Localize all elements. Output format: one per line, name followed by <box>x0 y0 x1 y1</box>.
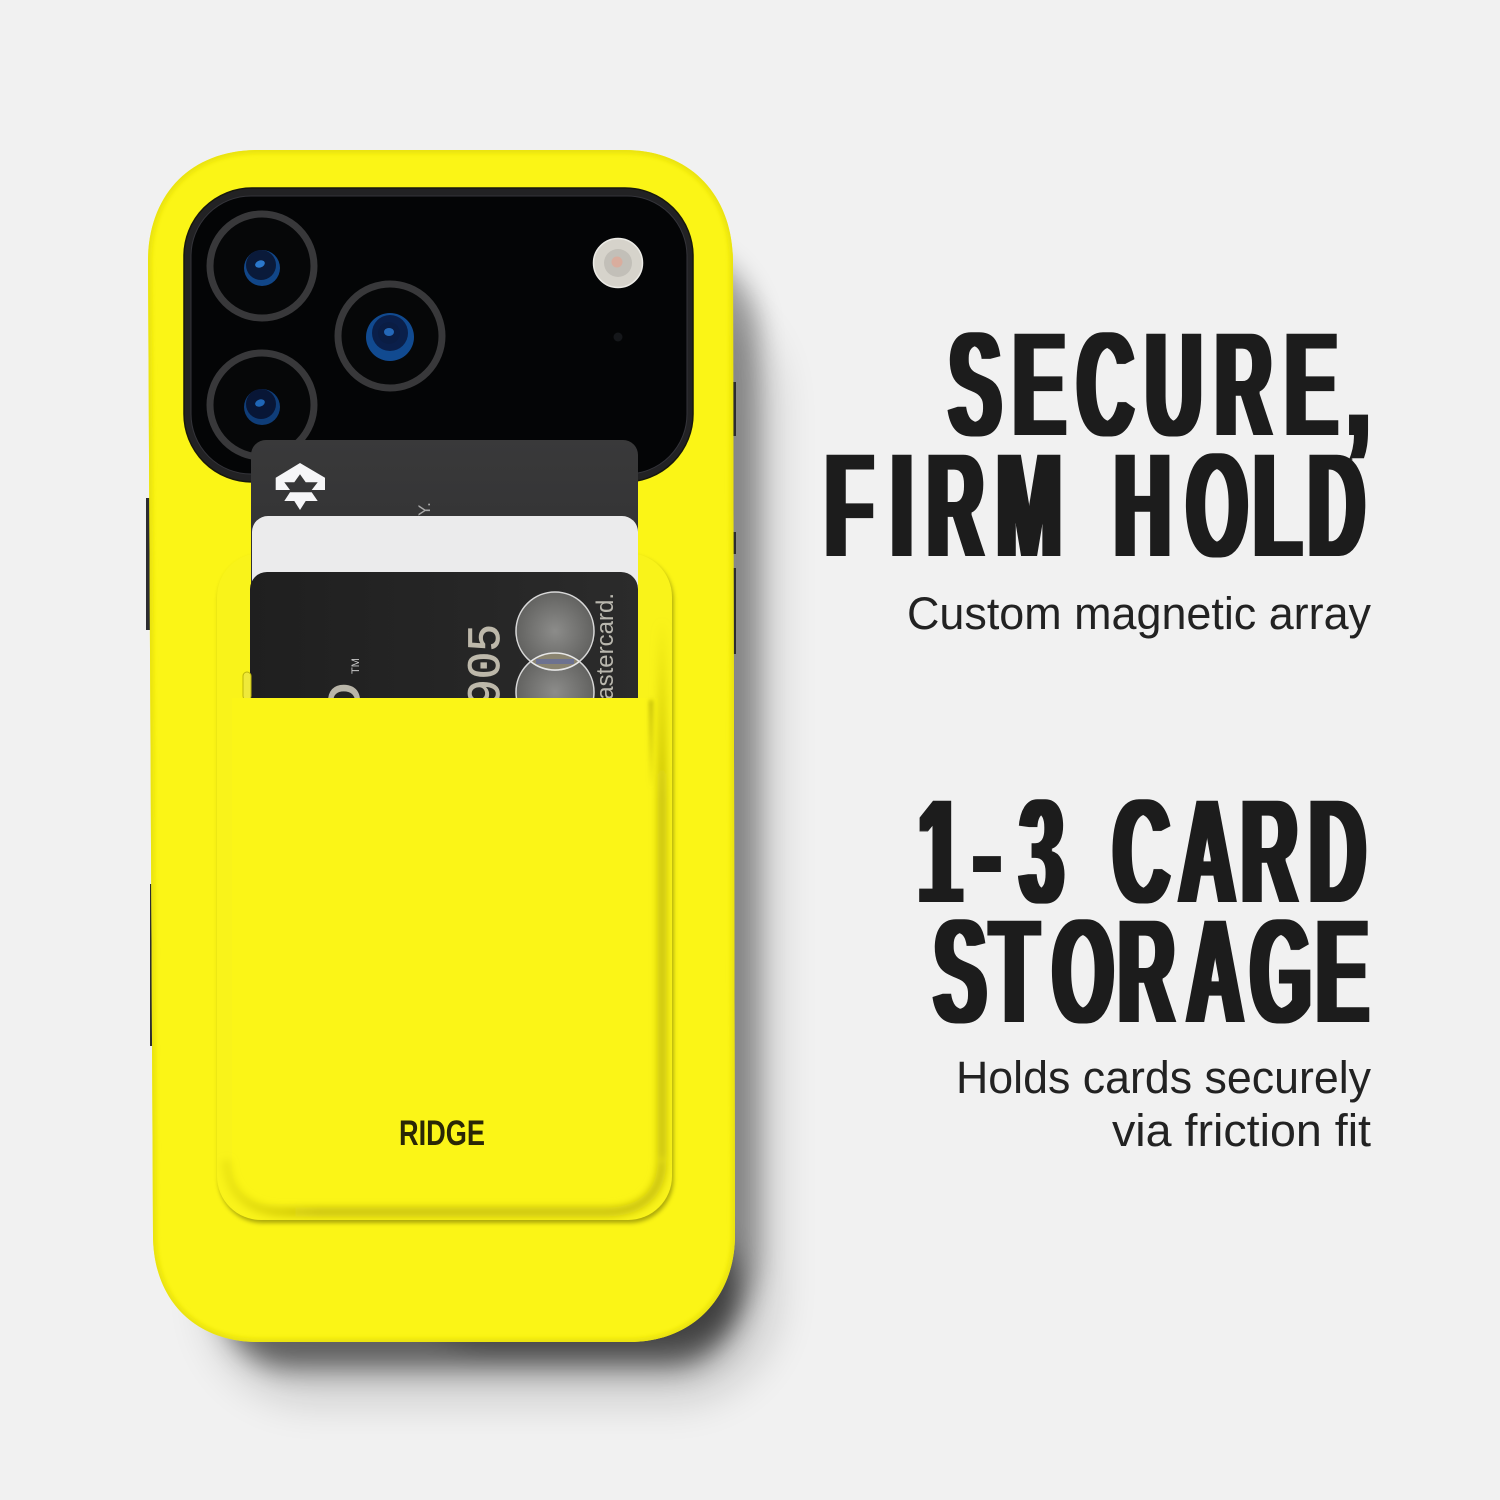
card: black mastercard <box>250 572 638 698</box>
lens: top <box>210 214 314 318</box>
card fine print: Y. <box>415 502 434 516</box>
infographic canvas <box>146 150 1371 1417</box>
heading: card storage <box>918 769 1368 1056</box>
heading: secure firm hold: SECURE, <box>949 302 1369 469</box>
card brand mark: D <box>318 683 370 716</box>
heading: card storage: 1-3 CARD <box>918 769 1366 936</box>
wallet logo: RIDGE <box>399 1114 485 1153</box>
card: white middle card <box>252 516 638 589</box>
heading: card storage: STORAGE <box>934 889 1368 1056</box>
flash <box>594 238 642 288</box>
phone with wallet <box>146 150 775 1400</box>
phone drop shadow <box>210 245 775 1400</box>
card number: 905 <box>461 624 513 707</box>
card: dark back card <box>251 440 638 584</box>
lens: middle <box>338 284 442 388</box>
caption: magnetic array: Custom magnetic array <box>907 588 1371 639</box>
lens: bottom <box>210 353 314 457</box>
card logo <box>276 463 325 510</box>
wallet pocket front <box>226 620 662 1212</box>
phone case <box>148 150 735 1342</box>
caption: friction fit: Holds cards securely <box>956 1052 1371 1103</box>
microphone <box>614 332 622 342</box>
card trademark: TM <box>350 658 362 674</box>
side buttons <box>146 382 736 1046</box>
cards <box>250 440 638 698</box>
mastercard wordmark: astercard. <box>592 593 619 700</box>
heading: secure firm hold <box>825 302 1369 590</box>
caption: friction fit <box>956 1052 1372 1156</box>
heading: secure firm hold: FIRM HOLD <box>825 423 1365 590</box>
camera island <box>184 188 693 482</box>
wallet back flange <box>217 553 674 1223</box>
caption: friction fit: via friction fit <box>1112 1105 1372 1156</box>
mastercard circles <box>515 591 595 698</box>
